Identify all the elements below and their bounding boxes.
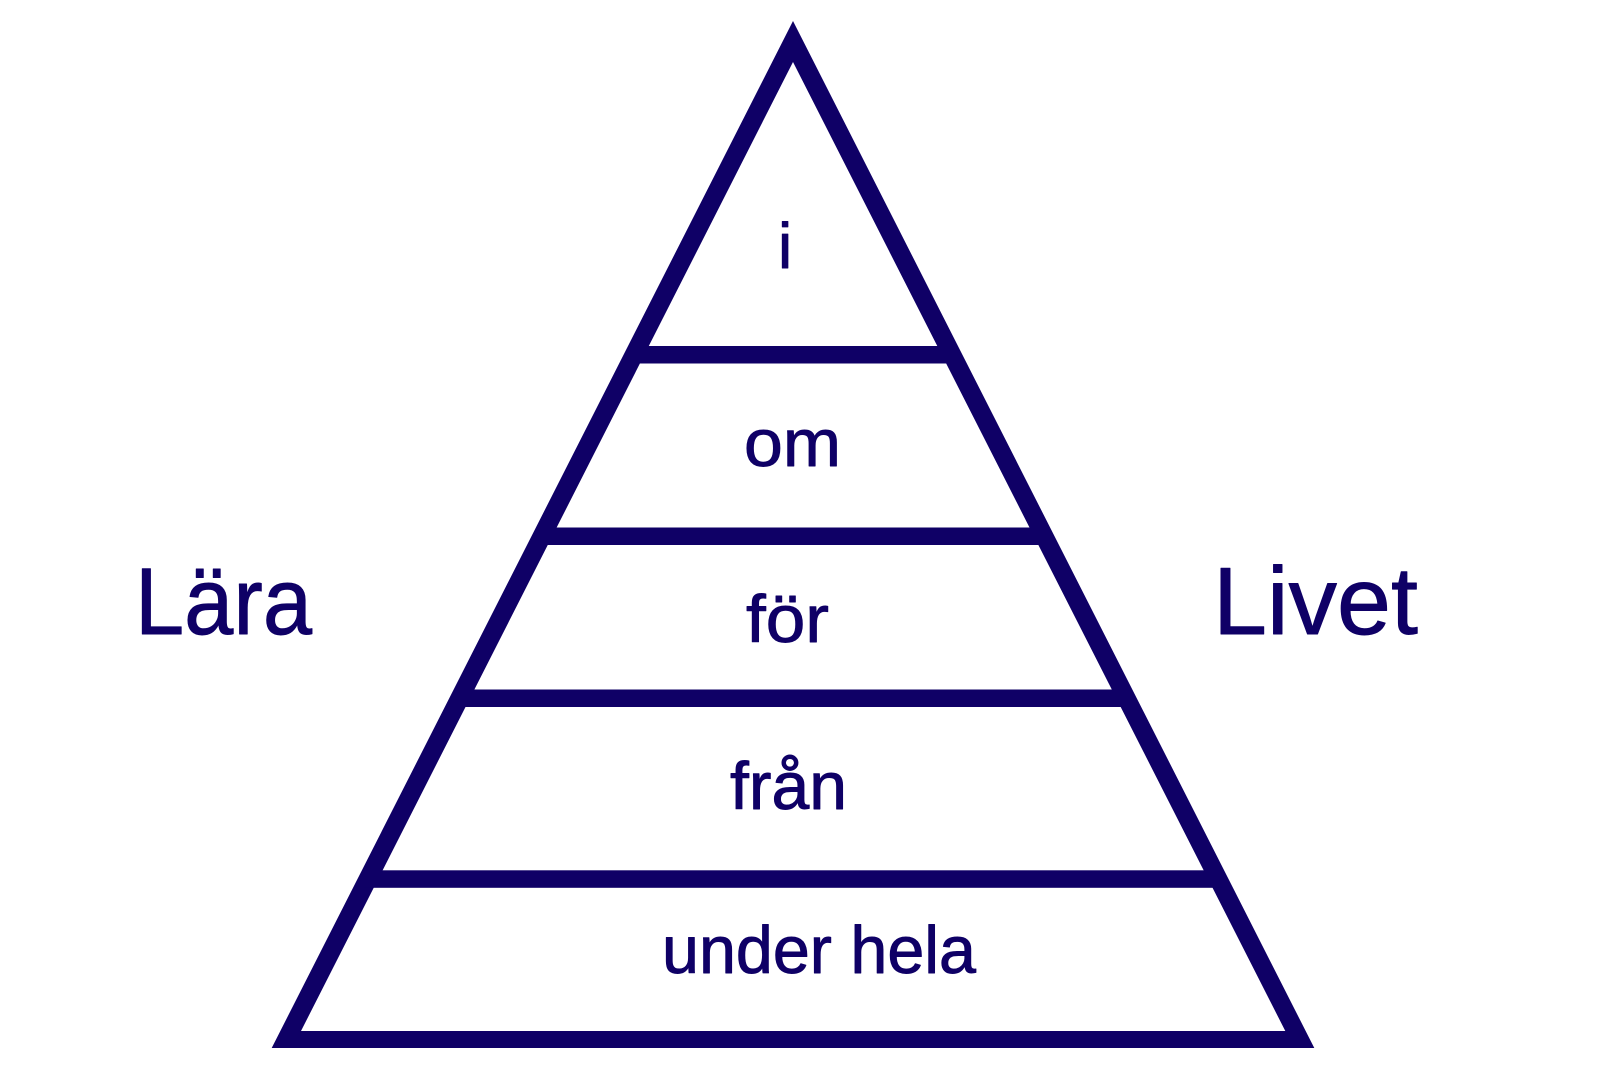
tier label: i: i — [778, 210, 792, 282]
side label: Lära: Lära — [135, 549, 312, 655]
tier label: under hela: under hela — [662, 913, 977, 988]
tier divider 1 — [628, 346, 958, 364]
side label: Livet: Livet — [1213, 548, 1418, 655]
pyramid diagram — [272, 21, 1314, 1048]
tier divider 3 — [455, 690, 1131, 707]
tier divider 2 — [537, 528, 1049, 545]
tier label: från: från — [730, 749, 847, 824]
tier label: om: om — [744, 406, 841, 481]
tier divider 4 — [364, 870, 1222, 888]
tier label: för: för — [746, 582, 829, 657]
pyramid outline — [272, 21, 1314, 1048]
